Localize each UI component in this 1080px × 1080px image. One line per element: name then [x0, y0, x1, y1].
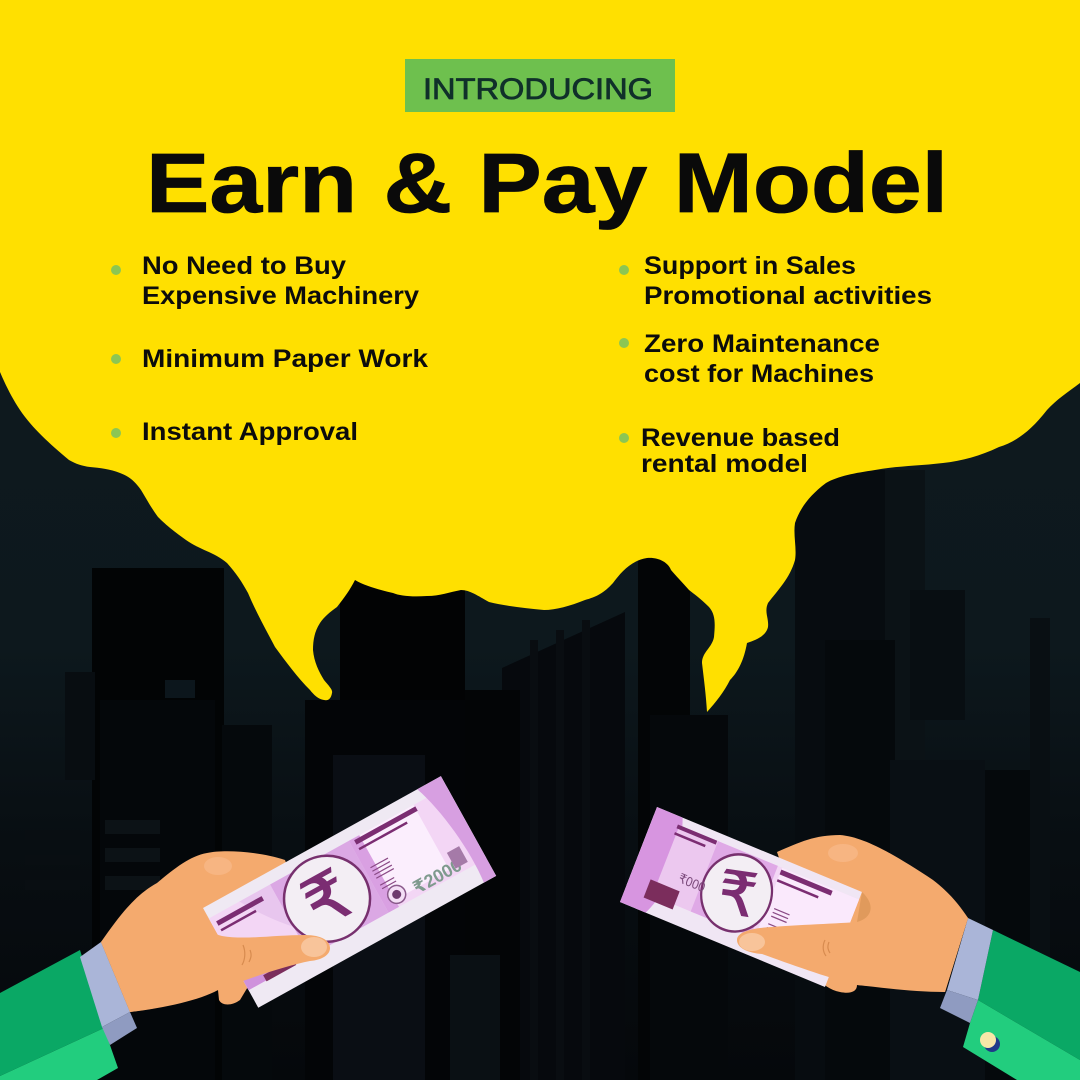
benefits list: right column [619, 252, 932, 478]
back of right hand [777, 835, 968, 993]
bullet: sales support: Promotional activities [644, 282, 932, 310]
left banknote [203, 776, 496, 1008]
back of left hand [101, 851, 300, 1012]
bullet: sales support: Support in Sales [644, 252, 856, 280]
bullet: no need to buy machinery: Expensive Machinery [142, 282, 419, 310]
left sleeve [0, 942, 137, 1080]
bullet: revenue based rental [619, 424, 840, 478]
right thumb and palm [737, 889, 968, 992]
right sleeve [940, 918, 1080, 1080]
bullet: minimum paper work: Minimum Paper Work [142, 345, 428, 373]
cuff button [984, 1036, 1000, 1052]
badge: INTRODUCING: INTRODUCING [423, 73, 653, 106]
yellow speech blob [0, 0, 1080, 712]
right banknote [620, 807, 862, 987]
bullet: revenue based rental: rental model [641, 450, 808, 478]
bullet: sales support [619, 252, 932, 310]
left banknote: 0000 [262, 943, 295, 971]
denomination: ₹2000 [410, 855, 465, 898]
left hand holding banknote [0, 776, 496, 1080]
left thumb and palm [101, 905, 330, 1012]
thumb nail [739, 933, 765, 951]
badge: INTRODUCING [405, 59, 675, 112]
right rupee symbol: ₹ [714, 858, 762, 932]
rupee symbol: ₹ [290, 855, 366, 945]
bullet: no need to buy machinery [111, 252, 419, 310]
knuckle highlight [828, 844, 858, 862]
thumb nail [301, 937, 327, 957]
title: Earn & Pay Model [146, 136, 948, 230]
bullet: zero maintenance: Zero Maintenance [644, 330, 880, 358]
bullet: instant approval: Instant Approval [142, 418, 358, 446]
bullet: no need to buy machinery: No Need to Buy [142, 252, 346, 280]
knuckle highlight [204, 857, 232, 875]
serial number: ₹000 [676, 871, 707, 895]
bullet: zero maintenance [619, 330, 880, 388]
benefits list: left column [111, 252, 428, 446]
bullet: revenue based rental: Revenue based [641, 424, 840, 452]
right hand holding banknote [620, 807, 1080, 1080]
bullet: zero maintenance: cost for Machines [644, 360, 874, 388]
